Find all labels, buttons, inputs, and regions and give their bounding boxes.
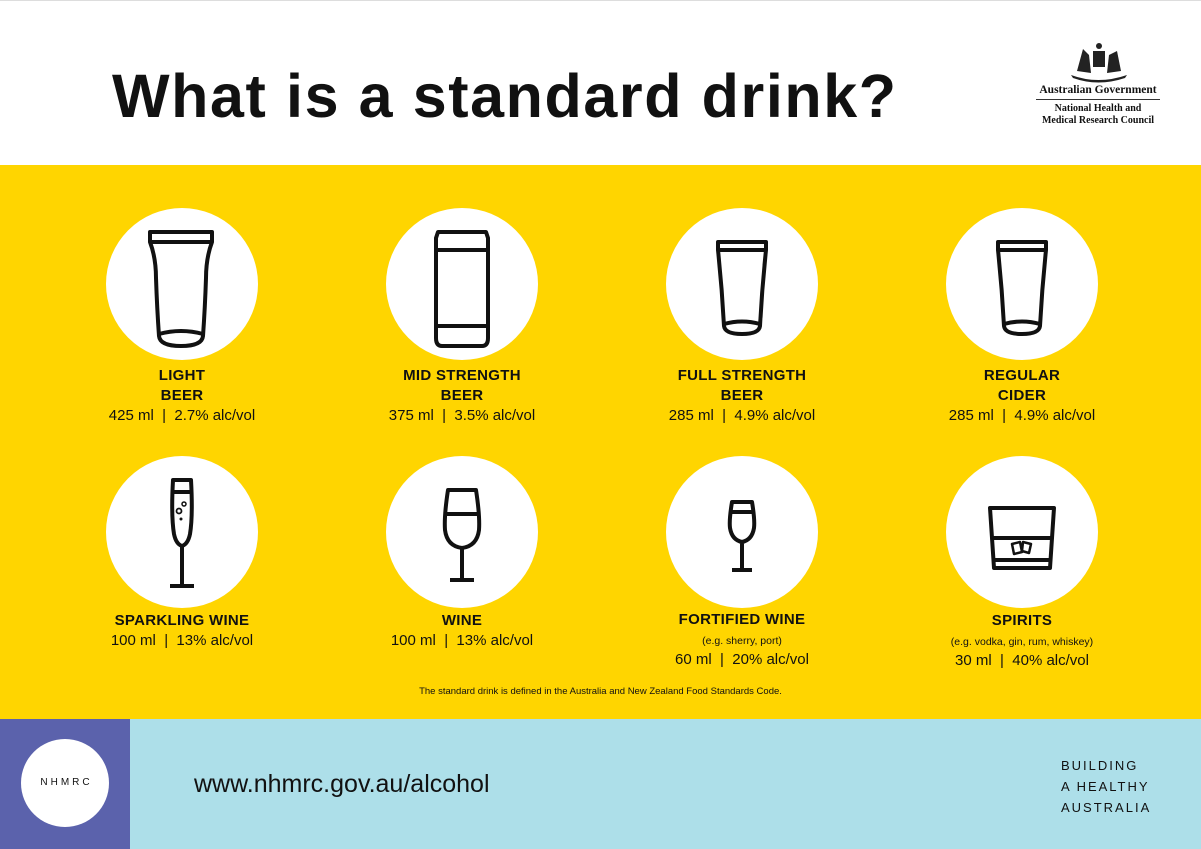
panel: drinks: 285 ml | 4.9% alc/vol (669, 407, 815, 424)
panel: drinks: SPARKLING WINE (115, 612, 249, 629)
tagline (1061, 758, 1151, 815)
panel: drinks: FULL STRENGTH (678, 367, 806, 384)
title: What is a standard drink? (112, 62, 898, 130)
panel: drinks: SPIRITS (992, 612, 1052, 629)
panel: drinks: (e.g. vodka, gin, rum, whiskey) (951, 636, 1093, 648)
NHMRC badge (0, 719, 130, 849)
drink: wine (386, 456, 538, 649)
tagline: A HEALTHY (1061, 779, 1150, 794)
panel: drinks: LIGHT (159, 367, 205, 384)
panel: drinks: 285 ml | 4.9% alc/vol (949, 407, 1095, 424)
panel: drinks: CIDER (998, 387, 1046, 404)
drink: fortified wine (666, 456, 818, 668)
drink: spirits (946, 456, 1098, 669)
footer (0, 719, 1201, 849)
drink: mid strength beer (386, 208, 538, 424)
drink: full strength beer (666, 208, 818, 424)
tagline: BUILDING (1061, 758, 1138, 773)
drink: light beer (106, 208, 258, 424)
panel: drinks (0, 165, 1201, 719)
url: www.nhmrc.gov.au/alcohol (194, 770, 490, 798)
tagline: AUSTRALIA (1061, 800, 1151, 815)
logo: Australian Government NHMRC: Medical Research Council (1042, 115, 1154, 126)
panel: drinks: BEER (721, 387, 763, 404)
header (0, 0, 1201, 165)
logo: Australian Government NHMRC (1036, 43, 1160, 126)
panel: drinks: 425 ml | 2.7% alc/vol (109, 407, 255, 424)
panel: drinks: 100 ml | 13% alc/vol (391, 632, 533, 649)
logo: Australian Government NHMRC: Australian Government (1039, 84, 1157, 96)
panel: drinks: REGULAR (984, 367, 1060, 384)
panel: drinks: MID STRENGTH (403, 367, 521, 384)
panel: drinks: FORTIFIED WINE (679, 611, 805, 628)
NHMRC badge: NHMRC (40, 777, 93, 788)
panel: drinks: (e.g. sherry, port) (702, 635, 782, 647)
panel: drinks: 30 ml | 40% alc/vol (955, 652, 1089, 669)
panel: drinks: BEER (161, 387, 203, 404)
panel: drinks: BEER (441, 387, 483, 404)
logo: Australian Government NHMRC: National Health and (1055, 103, 1141, 114)
panel: drinks: 375 ml | 3.5% alc/vol (389, 407, 535, 424)
panel: drinks: 100 ml | 13% alc/vol (111, 632, 253, 649)
drink: sparkling wine (106, 456, 258, 649)
panel: drinks: 60 ml | 20% alc/vol (675, 651, 809, 668)
panel: drinks: WINE (442, 612, 482, 629)
drink: regular cider (946, 208, 1098, 424)
footnote: The standard drink is defined in the Australia and New Zealand Food Standards Code. (419, 686, 782, 697)
